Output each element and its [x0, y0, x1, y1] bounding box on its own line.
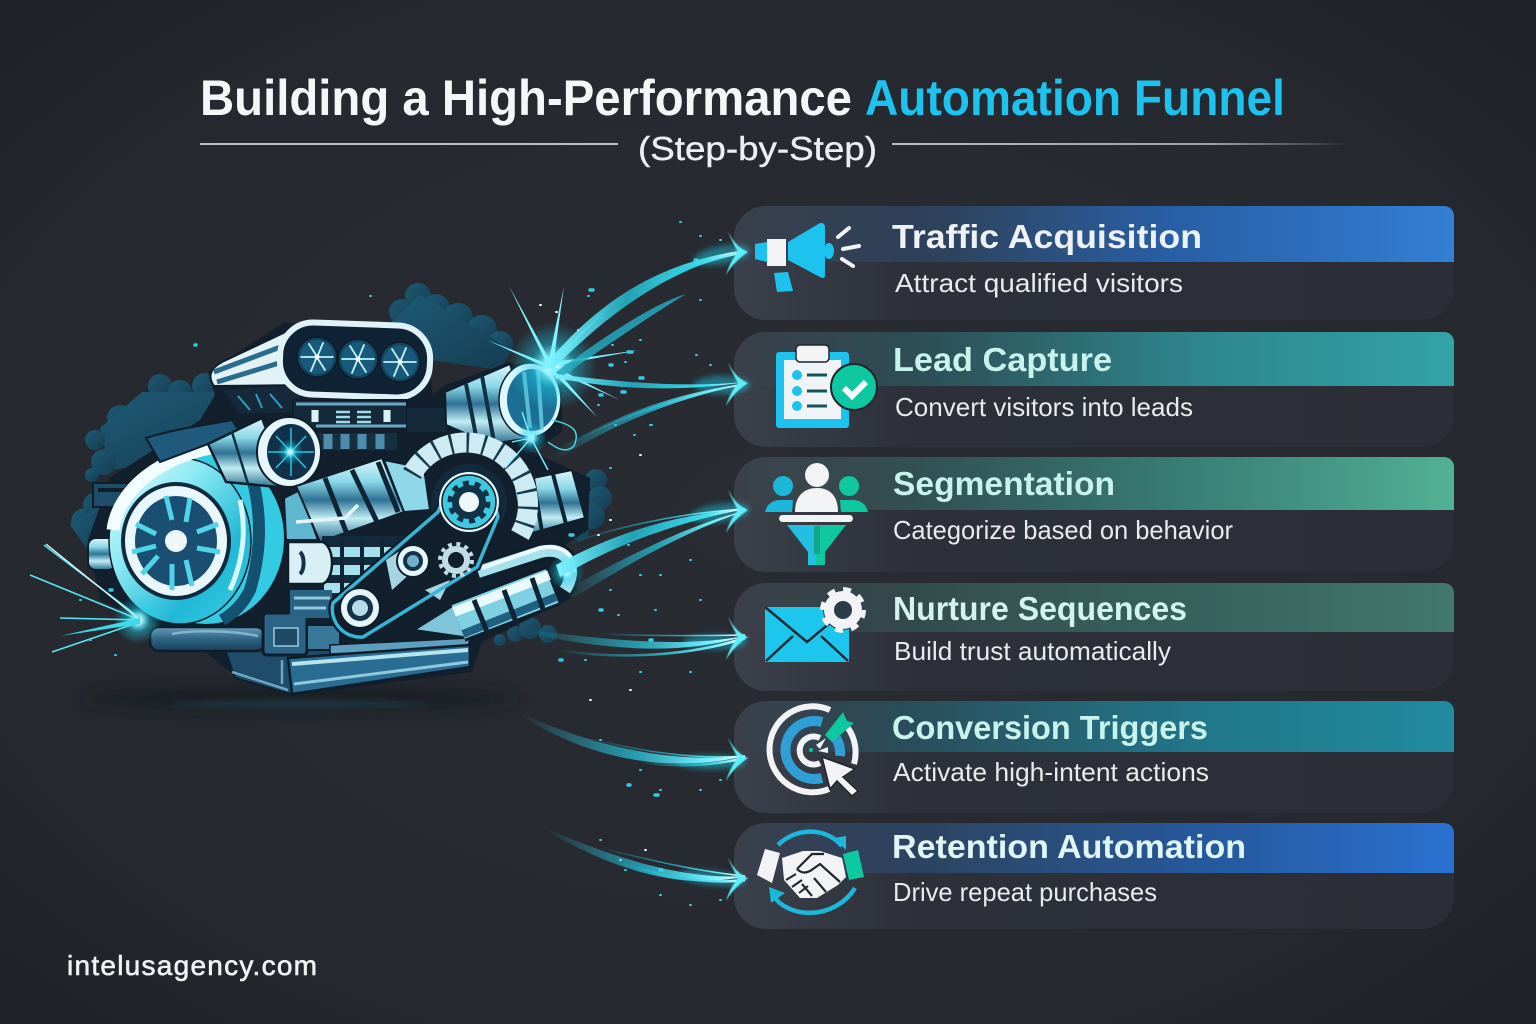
top blower housing: [210, 321, 431, 450]
card 2: Lead Capture: Convert visitors into leads: [895, 392, 1193, 422]
crank gear: [439, 472, 499, 532]
upper right pipe: [407, 363, 561, 444]
card 5: Conversion Triggers: Conversion Triggers: [892, 709, 1208, 746]
card 4: Nurture Sequences: Nurture Sequences: [893, 590, 1187, 627]
arrow 6: [545, 828, 748, 901]
title: Building a High-Performance: [200, 70, 852, 126]
icon: clipboard: [776, 345, 877, 428]
sparks burst top: [487, 286, 640, 590]
card 1: Traffic Acquisition: Attract qualified visitors: [895, 268, 1183, 298]
ground shadow and reflection: [80, 686, 520, 710]
subtitle with rules: (Step-by-Step): [638, 130, 877, 167]
card 3: Segmentation: [734, 457, 1454, 572]
card 2: Lead Capture: [734, 332, 1454, 447]
icon: handshake with cycle arrows: [757, 832, 864, 913]
footer website: intelusagency.com: [67, 950, 317, 981]
right chrome pipe: [513, 470, 585, 536]
middle chrome pipes: [284, 458, 430, 618]
side stubs: [88, 483, 137, 570]
icon: audience funnel: [765, 463, 868, 565]
card 1: Traffic Acquisition: [734, 206, 1454, 320]
title: [200, 70, 1285, 126]
arrow 2: [553, 362, 750, 460]
card 6: Retention Automation: Retention Automation: [892, 828, 1246, 865]
spark particles: [80, 222, 721, 905]
ribbed pulley wheel: [412, 442, 528, 540]
engine illustration: [30, 222, 721, 905]
smoke clouds: [70, 283, 612, 646]
card 4: Nurture Sequences: Build trust automatically: [894, 636, 1171, 666]
arrow 3: [556, 489, 751, 600]
card 4: Nurture Sequences: [734, 583, 1454, 691]
arrow 1: [548, 231, 751, 378]
serpentine belt: [332, 491, 498, 637]
card 3: Segmentation: Categorize based on behavior: [893, 515, 1233, 545]
engine base: [150, 613, 470, 694]
card 6: Retention Automation: [734, 823, 1454, 929]
small front turbo: [257, 417, 321, 487]
card 3: Segmentation: Segmentation: [893, 465, 1115, 502]
icon: megaphone: [755, 223, 859, 292]
title: Automation Funnel: [865, 70, 1285, 126]
card 2: Lead Capture: Lead Capture: [893, 341, 1112, 378]
engine silhouette: [88, 322, 590, 696]
icon: target with cursor: [770, 706, 858, 796]
sparks burst lower left: [30, 544, 162, 652]
idler pulleys: [340, 544, 472, 628]
card 1: Traffic Acquisition: Traffic Acquisition: [892, 218, 1202, 255]
card 5: Conversion Triggers: Activate high-intent actions: [893, 757, 1209, 787]
icon: envelope with gear: [765, 590, 863, 662]
card 6: Retention Automation: Drive repeat purchases: [893, 877, 1157, 907]
arrow 5: [520, 713, 748, 781]
curved intake pipe: [146, 418, 288, 488]
main turbine: [109, 446, 285, 625]
arrow 4: [530, 616, 748, 660]
card 5: Conversion Triggers: [734, 701, 1454, 813]
lower exhaust pipe: [414, 547, 574, 638]
